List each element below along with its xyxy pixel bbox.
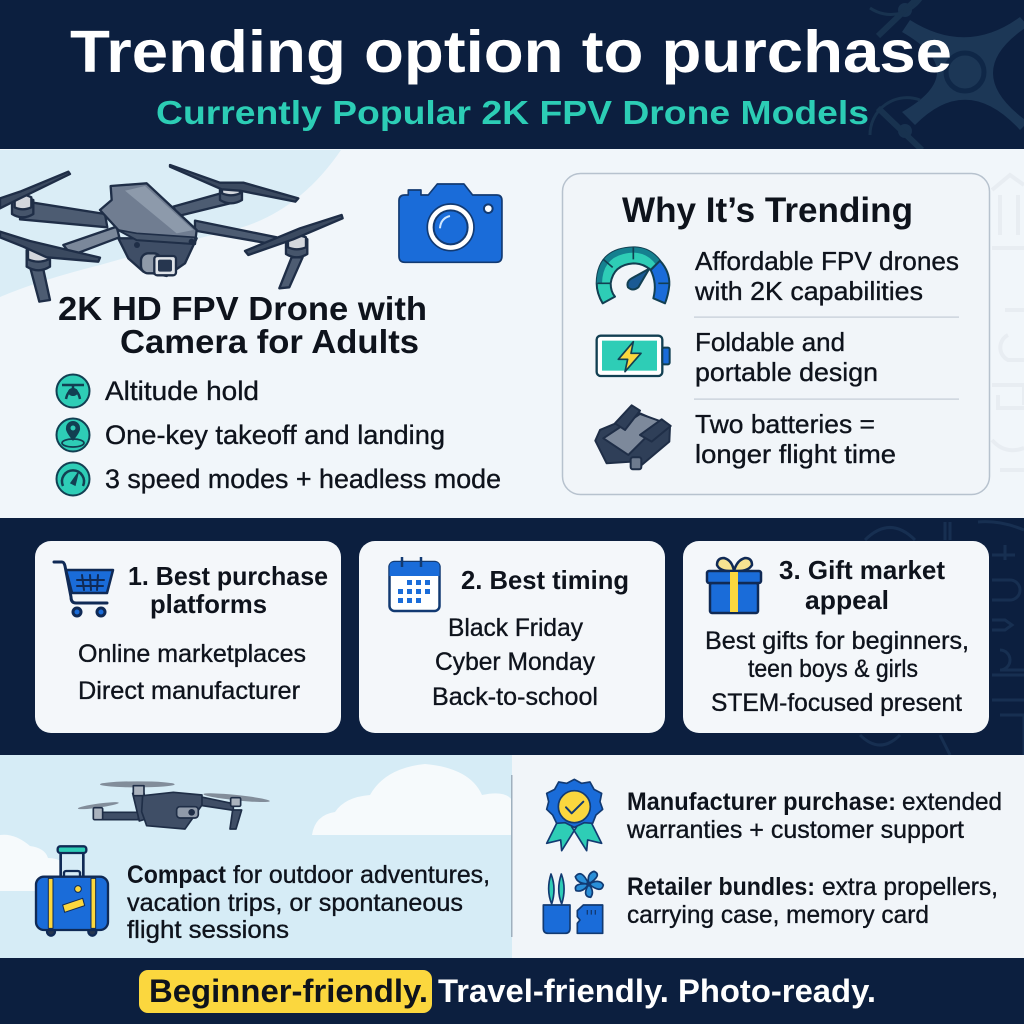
icon: shopping cart (54, 562, 113, 616)
retailer text: carrying case, memory card (627, 901, 929, 929)
icon: folded drone (595, 405, 671, 469)
card heading: 1. Best purchase (128, 561, 328, 591)
feature: one-key takeoff: One-key takeoff and landing (105, 420, 445, 450)
propellers (0, 172, 70, 208)
manufacturer text: extended (902, 788, 1002, 816)
card heading: platforms (150, 589, 267, 619)
icon: large drone (0, 165, 343, 302)
retailer text: Retailer bundles: (627, 873, 815, 901)
row 2 text: Foldable and (695, 327, 845, 357)
background tech line pattern (992, 175, 1024, 470)
card body (78, 640, 306, 705)
panel: why it's trending (562, 174, 990, 494)
card body: Best gifts for beginners, (705, 627, 969, 655)
travel text: for outdoor adventures, (233, 861, 490, 889)
travel text (127, 861, 490, 944)
product heading (58, 290, 427, 360)
icon: calendar (390, 557, 440, 611)
icon: suitcase (36, 846, 108, 936)
panel: deals (511, 755, 1024, 958)
tagline: Travel-friendly. Photo-ready. (438, 973, 876, 1009)
card body: teen boys & girls (748, 655, 918, 683)
retailer text: extra propellers, (822, 873, 998, 901)
panel: product overview (0, 149, 1024, 518)
icon: camera (399, 184, 502, 262)
feature: altitude hold (56, 374, 259, 408)
panel: travel (0, 755, 512, 958)
title: Trending option to purchase (70, 19, 952, 85)
icon: flying drone (78, 781, 270, 829)
card body (432, 614, 598, 711)
highlight tag: Beginner-friendly. (149, 973, 428, 1009)
row 3 text: Two batteries = (695, 409, 875, 439)
card heading (128, 561, 328, 619)
card body (705, 627, 969, 717)
card body: STEM-focused present (711, 689, 962, 717)
row 3 text (695, 409, 896, 469)
card heading (779, 555, 945, 615)
heading: Why It’s Trending (622, 191, 913, 230)
card body: Online marketplaces (78, 640, 306, 668)
travel text: vacation trips, or spontaneous (127, 889, 463, 917)
row 1 text: with 2K capabilities (694, 276, 923, 306)
feature: speed modes: 3 speed modes + headless mode (105, 464, 501, 494)
card heading: appeal (805, 585, 889, 615)
subtitle: Currently Popular 2K FPV Drone Models (156, 94, 869, 131)
drone body (100, 183, 197, 244)
manufacturer text: Manufacturer purchase: (627, 788, 896, 816)
footer band (0, 958, 1024, 1024)
card body: Black Friday (448, 614, 583, 642)
row 3 text: longer flight time (695, 439, 896, 469)
row 1 text: Affordable FPV drones (695, 246, 959, 276)
product heading: Camera for Adults (120, 323, 419, 360)
card: gift market (683, 541, 989, 733)
travel text: flight sessions (127, 916, 289, 944)
clouds (0, 764, 512, 891)
card: best timing (359, 541, 665, 733)
motors (12, 197, 33, 217)
row 2 text (695, 327, 878, 387)
manufacturer text: warranties + customer support (626, 816, 964, 844)
icon: warranty badge (547, 779, 603, 851)
travel text: Compact (127, 861, 227, 889)
row 1 text (694, 246, 959, 306)
card body: Direct manufacturer (78, 677, 300, 705)
band: recommendations (0, 518, 1024, 755)
card: purchase platforms (35, 541, 341, 733)
product heading: 2K HD FPV Drone with (58, 290, 427, 327)
arms (20, 202, 107, 227)
icon: gift box (707, 558, 761, 613)
gimbal (118, 238, 197, 276)
icon: accessories bundle (543, 871, 603, 933)
card body: Cyber Monday (435, 648, 595, 676)
icon: battery (597, 336, 670, 376)
retailer text (627, 873, 998, 929)
row 2 text: portable design (695, 357, 878, 387)
card heading: 3. Gift market (779, 555, 945, 585)
feature: altitude hold: Altitude hold (105, 376, 259, 406)
card heading: 2. Best timing (461, 565, 629, 595)
card body: Back-to-school (432, 683, 598, 711)
manufacturer text (626, 788, 1002, 844)
icon: gauge (597, 247, 669, 303)
legs (31, 269, 50, 302)
header band (0, 0, 1024, 150)
icon: drone watermark (870, 0, 1024, 150)
